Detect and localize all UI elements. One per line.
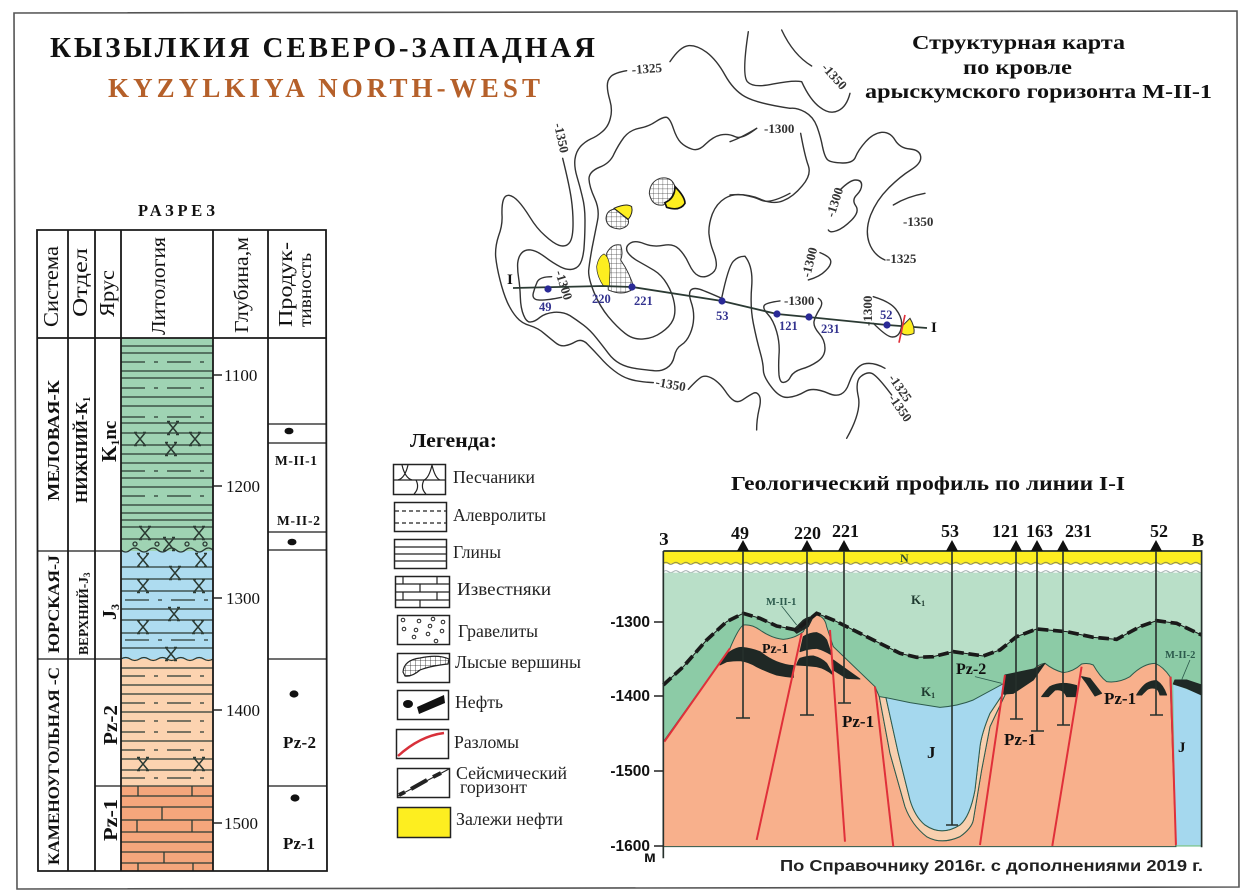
well numbers: 231: [1065, 521, 1092, 541]
column headers: Ярус: [95, 270, 119, 317]
unit labels: М-II-1: [766, 597, 796, 608]
system, series, stage labels: [44, 379, 122, 865]
frame lines: [663, 551, 1202, 858]
contour labels: -1325: [631, 60, 663, 77]
system, series, stage labels: 1: [108, 440, 122, 446]
well labels: 53: [716, 309, 728, 323]
legend item: siltstones: Алевролиты: [453, 505, 546, 525]
profile heading: Геологический профиль по линии I-I: [731, 473, 1125, 495]
map heading: по кровле: [963, 57, 1072, 79]
panel: structural map: [496, 30, 937, 438]
panel: geological profile: [610, 521, 1204, 866]
system, series, stage labels: nc: [100, 421, 121, 440]
depth scale: 1200: [226, 477, 260, 496]
contour labels: -1300: [784, 293, 814, 308]
legend item: oil: Нефть: [455, 692, 503, 712]
contour labels: -1350: [819, 60, 850, 93]
legend item: limestones: [396, 576, 551, 608]
table grid: [37, 230, 327, 871]
column headers: Система: [39, 245, 63, 327]
unit labels: Pz-1: [842, 712, 874, 731]
unit labels: K: [911, 592, 921, 607]
lower cretaceous fill: [663, 613, 1202, 847]
well labels: [539, 292, 892, 336]
contour labels: -1350: [886, 391, 915, 425]
well numbers: 163: [1026, 521, 1053, 541]
unit labels: J: [1178, 740, 1186, 756]
depth scale: 1100: [224, 366, 257, 385]
contour labels: -1300: [823, 185, 846, 219]
well numbers: 53: [941, 521, 959, 541]
well numbers: 221: [832, 521, 859, 541]
legend item: oil pools: [398, 808, 563, 838]
depth scale: 1400: [226, 701, 260, 720]
legend item: clays: Глины: [453, 542, 501, 562]
leader lines: [782, 606, 1190, 683]
well labels: 221: [634, 294, 653, 308]
contour labels: -1300: [860, 296, 875, 326]
oil bodies: [720, 617, 1202, 697]
system, series, stage labels: ЮРСКАЯ-J: [46, 555, 63, 653]
upper cretaceous fill: [663, 573, 1202, 847]
unit labels: K: [921, 684, 931, 699]
unit labels: J: [927, 743, 936, 762]
unit labels: Pz-1: [1104, 689, 1136, 708]
section line end labels: I: [931, 320, 937, 336]
oil pool east with fault: [899, 315, 914, 343]
system, series, stage labels: 3: [82, 572, 92, 577]
depth axis: -1500: [610, 763, 650, 780]
contour labels: -1300: [798, 246, 820, 279]
well numbers: 220: [794, 523, 821, 543]
depth scale: 1500: [224, 814, 258, 833]
well numbers: 49: [731, 523, 749, 543]
system, series, stage labels: Pz-2: [100, 705, 122, 745]
contour labels: -1300: [552, 268, 576, 302]
unit labels: [762, 551, 1195, 762]
panel: stratigraphic column: [37, 201, 327, 871]
well numbers: З: [659, 529, 669, 549]
system, series, stage labels: ВЕРХНИЙ-J: [76, 577, 91, 655]
legend title: Легенда:: [410, 430, 497, 452]
bald tops and oil pools: [597, 178, 685, 293]
productivity markers: М-II-1: [275, 453, 317, 468]
contour labels: -1350: [903, 214, 933, 229]
map heading: арыскумского горизонта М-II-1: [865, 81, 1212, 103]
well labels: 220: [592, 292, 611, 306]
contour lines north-east: [745, 30, 850, 112]
productivity markers: Pz-2: [283, 733, 316, 752]
legend item: clays: [394, 540, 501, 568]
lithology pattern lines: [121, 346, 213, 871]
legend item: seismic horizon: [398, 763, 567, 798]
faults: [664, 630, 1176, 847]
contour lines west: [496, 46, 790, 430]
productivity markers: Pz-1: [283, 834, 315, 853]
legend item: sandstones: Песчаники: [453, 467, 535, 487]
depth axis: м: [644, 849, 656, 866]
system, series, stage labels: КАМЕНОУГОЛЬНАЯ -С: [46, 667, 63, 865]
depth scale: 1300: [226, 589, 260, 608]
legend item: siltstones: [394, 502, 546, 532]
well labels: 52: [880, 308, 892, 322]
lithology fills: [121, 338, 213, 871]
well numbers: 52: [1150, 521, 1168, 541]
system, series, stage labels: Pz-1: [100, 799, 122, 841]
legend item: faults: [396, 730, 519, 758]
column headers: Отдел: [68, 248, 92, 317]
section line I-I: [513, 286, 927, 328]
well numbers: 121: [992, 521, 1019, 541]
depth axis: [610, 614, 663, 866]
legend item: bald tops: [398, 652, 581, 682]
well labels: 121: [779, 319, 798, 333]
section line end labels: I: [507, 272, 513, 288]
section line end labels: [507, 272, 937, 336]
palaeozoic block: [663, 615, 1176, 847]
well numbers: [659, 521, 1204, 550]
system, series, stage labels: J: [99, 610, 121, 620]
unit labels: N: [900, 551, 909, 565]
depth axis: -1300: [610, 614, 650, 631]
wells: [736, 540, 1163, 825]
basin rim: [879, 693, 1005, 841]
unit labels: Pz-1: [1004, 730, 1036, 749]
contour labels: [551, 60, 933, 425]
system, series, stage labels: 1: [81, 397, 93, 402]
productivity markers: М-II-2: [277, 513, 320, 528]
table inner dividers: [38, 424, 327, 786]
source note: По Справочнику 2016г. с дополнениями 2019 г.: [780, 858, 1203, 875]
well numbers: В: [1192, 530, 1204, 550]
column headers: Литология: [148, 237, 170, 335]
unit labels: Pz-1: [762, 642, 788, 657]
jurassic basin: [886, 683, 1004, 831]
system, series, stage labels: 3: [108, 604, 122, 610]
wavy unconformities: [663, 561, 1202, 574]
legend item: oil: [398, 690, 503, 720]
map heading: [865, 32, 1212, 103]
column heading: РАЗРЕЗ: [138, 201, 215, 220]
neogene layer: [663, 551, 1202, 564]
wells: [544, 283, 891, 329]
system, series, stage labels: НИЖНИЙ-К: [72, 402, 91, 503]
unit labels: М-II-2: [1165, 650, 1195, 661]
jurassic east: [1173, 684, 1202, 845]
depth scale: [213, 366, 260, 833]
legend item: bald tops: Лысые вершины: [455, 652, 581, 672]
contour labels: -1350: [654, 374, 687, 394]
column headers: [39, 237, 315, 335]
legend item: seismic horizon: горизонт: [460, 777, 527, 797]
legend item: sandstones: [393, 464, 535, 494]
map heading: Структурная карта: [912, 32, 1125, 54]
contour lines east: [730, 108, 925, 438]
depth axis: -1600: [610, 838, 650, 855]
contour labels: -1300: [764, 121, 794, 136]
title: english: KYZYLKIYA NORTH-WEST: [108, 73, 540, 103]
system, series, stage labels: МЕЛОВАЯ-К: [44, 379, 63, 501]
legend item: limestones: Известняки: [457, 579, 551, 599]
productivity markers: [275, 428, 320, 853]
profile geology: [663, 551, 1202, 858]
contour labels: -1350: [551, 122, 572, 154]
seismic horizon: [663, 613, 1202, 685]
unit labels: 1: [931, 691, 935, 700]
system, series, stage labels: K: [97, 446, 121, 462]
legend item: oil pools: Залежи нефти: [456, 809, 563, 829]
contour labels: -1325: [886, 251, 917, 266]
legend item: gravelites: [398, 616, 538, 644]
panel: legend: [393, 430, 581, 838]
contour labels: -1325: [886, 371, 916, 405]
unit labels: Pz-2: [956, 661, 986, 678]
legend item: faults: Разломы: [454, 732, 519, 752]
unit labels: 1: [921, 599, 925, 608]
legend item: gravelites: Гравелиты: [458, 621, 538, 641]
depth axis: -1400: [610, 688, 650, 705]
well labels: 49: [539, 300, 552, 314]
column headers: Глубина,м: [231, 237, 253, 333]
well labels: 231: [821, 322, 840, 336]
column headers: Продук-: [275, 242, 297, 327]
legend item: seismic horizon: Сейсмический: [456, 763, 567, 783]
title: russian: КЫЗЫЛКИЯ СЕВЕРО-ЗАПАДНАЯ: [50, 32, 595, 64]
column headers: тивность: [295, 253, 315, 327]
